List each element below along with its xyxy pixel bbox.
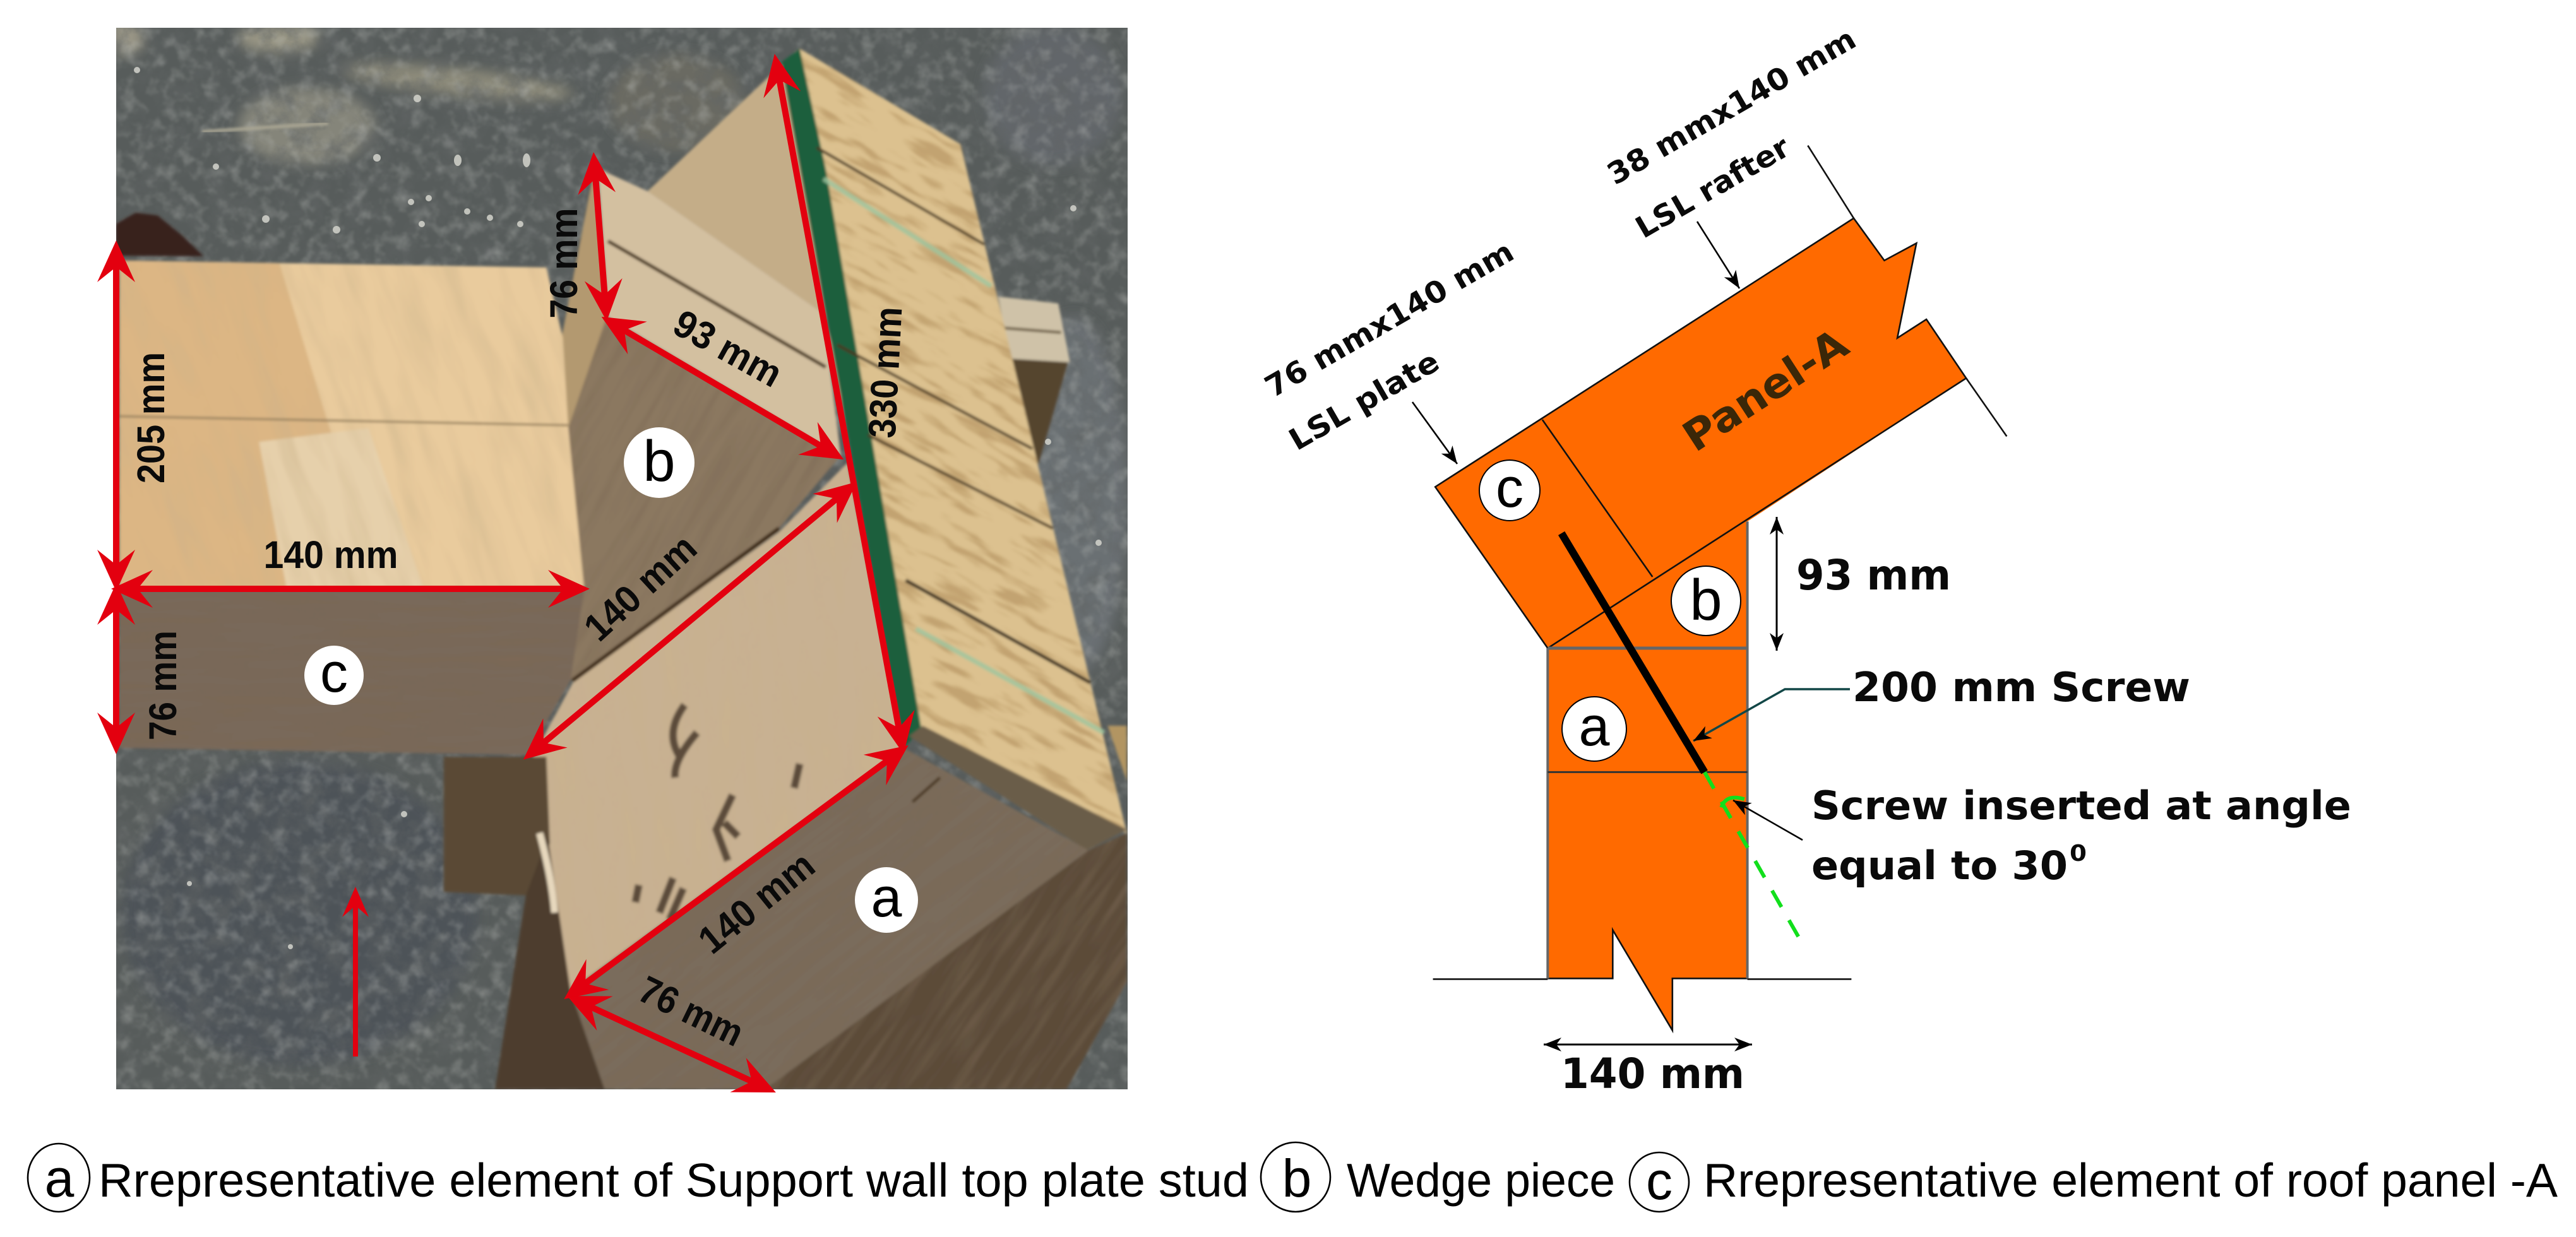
element markers on diagram xyxy=(1479,460,1741,761)
legend item a: a xyxy=(45,1149,75,1208)
back block xyxy=(998,297,1070,362)
OSB front edge xyxy=(909,726,1127,850)
photo element markers a b c: c xyxy=(320,641,348,704)
photo dimension labels: 140 mm xyxy=(264,533,398,576)
photo element markers a b c xyxy=(304,427,918,933)
a side face xyxy=(570,748,1088,1089)
photo dimension labels: 140 mm xyxy=(690,843,823,962)
panel: annotated photo of the connection xyxy=(97,28,1128,1092)
side face c xyxy=(119,591,584,755)
photo dimension labels: 76 mm xyxy=(542,208,585,318)
diagram labels: Panel-A xyxy=(1674,319,1857,461)
orange timber section xyxy=(1433,146,2007,1031)
panel: section diagram of the joint xyxy=(1259,21,2351,1098)
marker letters on diagram: a xyxy=(1579,695,1610,757)
shadow side xyxy=(765,833,1127,1089)
marker letters on diagram: c xyxy=(1496,456,1524,519)
screw xyxy=(1561,533,1705,772)
diagram labels: 0 xyxy=(2070,841,2087,867)
photo element markers a b c: b xyxy=(643,429,676,494)
legend item b: b xyxy=(1282,1149,1311,1208)
diagram labels: 140 mm xyxy=(1561,1050,1744,1098)
diagram labels: 93 mm xyxy=(1796,551,1951,600)
photo dimension labels: 76 mm xyxy=(632,968,751,1055)
OSB face xyxy=(800,49,1127,833)
diagram labels: LSL plate xyxy=(1283,344,1445,458)
marker letters on diagram: b xyxy=(1690,568,1722,632)
legend item c: Rrepresentative element of roof panel -A xyxy=(1703,1154,2558,1207)
legend item a: Rrepresentative element of Support wall top plate stud xyxy=(98,1154,1249,1207)
legend item b: Wedge piece xyxy=(1347,1154,1615,1207)
legend item c: c xyxy=(1646,1151,1673,1210)
legend xyxy=(28,1142,2558,1212)
diagram labels xyxy=(1259,21,2351,1098)
photo dimension labels: 76 mm xyxy=(141,630,184,740)
diagram labels: Screw inserted at angle xyxy=(1811,783,2351,829)
photo dimension labels: 140 mm xyxy=(576,526,705,649)
wedge face b xyxy=(568,317,841,681)
lower posts xyxy=(444,757,550,896)
marker letters on diagram xyxy=(1496,456,1722,757)
legend item b xyxy=(1261,1142,1615,1212)
diagram labels: equal to 30 xyxy=(1811,843,2068,889)
diagram labels: LSL rafter xyxy=(1630,129,1796,246)
photo dimension labels: 205 mm xyxy=(129,352,172,483)
plate top strip xyxy=(598,169,841,456)
dark object behind plate xyxy=(116,213,203,256)
diagram labels: 76 mmx140 mm xyxy=(1259,234,1520,405)
leader and dimension arrows xyxy=(1412,222,1850,1045)
photo dimension labels xyxy=(129,208,910,1055)
angle marker and dashed axis xyxy=(1705,772,1803,944)
diagram labels: 38 mmx140 mm xyxy=(1601,21,1862,192)
a top face xyxy=(533,463,903,990)
top face c xyxy=(119,261,584,589)
dimension arrows on photo xyxy=(116,61,902,1089)
photo dimension labels: 93 mm xyxy=(667,301,789,396)
diagram labels: 200 mm Screw xyxy=(1852,665,2190,711)
photo element markers a b c: a xyxy=(871,866,902,928)
photo dimension labels: 330 mm xyxy=(861,305,910,439)
grooves and marks xyxy=(119,148,1090,802)
rafter side face xyxy=(648,50,847,456)
small end strip xyxy=(561,169,607,428)
green edge xyxy=(781,49,921,748)
